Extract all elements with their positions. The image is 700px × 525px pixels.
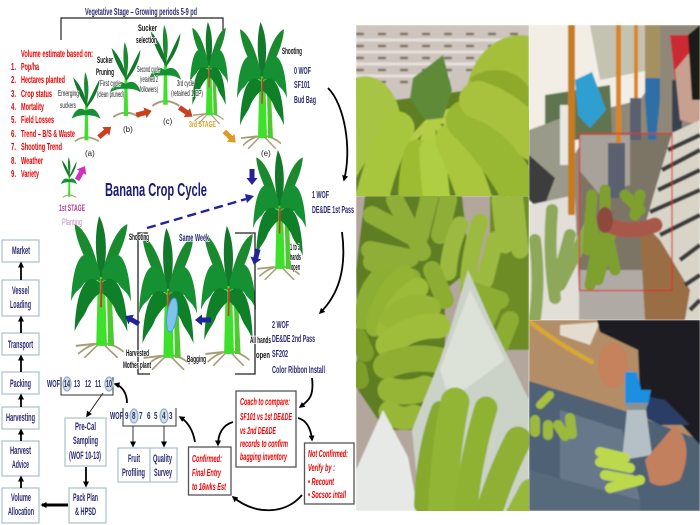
plant labels: 3rd cycle bbox=[177, 79, 194, 88]
timing labels: 1 WOF: DE&DE 1st Pass bbox=[312, 204, 354, 216]
volume estimate list bbox=[11, 48, 93, 180]
box: fruit profiling: Profiling bbox=[122, 467, 145, 479]
box: not confirmed bbox=[304, 443, 354, 504]
volume estimate list: 8. bbox=[11, 155, 16, 167]
plant: shooting, 0 WOF bbox=[237, 22, 287, 149]
box: coach to compare: records to confirm bbox=[240, 439, 288, 450]
flow: market to volume allocation: Packing bbox=[10, 378, 31, 390]
box: pre-cal sampling: (WOF 10-13) bbox=[69, 450, 101, 462]
box: not confirmed: • Recount bbox=[308, 477, 334, 488]
week of flowering row 9-3 bbox=[110, 408, 176, 426]
plant labels: followers) bbox=[140, 85, 158, 94]
week of flowering row 9-3: 5 bbox=[154, 410, 158, 422]
flow: market to volume allocation: Harvesting bbox=[6, 412, 35, 424]
box: quality survey bbox=[150, 448, 177, 482]
growth arrows bbox=[72, 103, 263, 329]
volume estimate list: Crop status bbox=[21, 88, 52, 100]
plant: third stage bbox=[190, 22, 228, 124]
volume estimate list: Pop/ha bbox=[21, 61, 39, 73]
timing labels: 2 WOF: 2 WOF bbox=[272, 319, 289, 331]
week of flowering row 9-3: 4 bbox=[162, 410, 166, 422]
plant labels: 1 to 3 bbox=[290, 242, 300, 252]
volume estimate list: Trend – B/S & Waste bbox=[21, 128, 75, 140]
timing labels: 2 WOF bbox=[272, 319, 325, 376]
volume estimate list: 1. bbox=[11, 61, 16, 73]
volume estimate list: 5. bbox=[11, 114, 16, 126]
volume estimate list: 3. bbox=[11, 88, 16, 100]
label: first stage planting: Planting bbox=[62, 217, 82, 227]
plant labels: Second cycle bbox=[137, 65, 160, 74]
plant labels: Emerging bbox=[58, 89, 79, 98]
box: confirmed: to 16wks Est bbox=[192, 482, 226, 493]
plant: sucker pruning bbox=[110, 42, 141, 117]
bag on plant bbox=[165, 297, 179, 333]
plant labels: (a) bbox=[85, 149, 95, 158]
flow: market to volume allocation: Loading bbox=[10, 299, 31, 311]
plant labels: First cycle bbox=[100, 79, 121, 88]
title: Banana Crop Cycle bbox=[105, 180, 207, 200]
box: quality survey: Survey bbox=[154, 467, 172, 479]
volume estimate list: 9. bbox=[11, 168, 16, 180]
volume estimate list: Hectares planted bbox=[21, 74, 65, 86]
label: first stage planting bbox=[59, 203, 85, 227]
timing labels: 2 WOF: SF202 bbox=[272, 348, 288, 360]
week of flowering row 14-10 bbox=[47, 377, 113, 395]
plant labels: Shooting bbox=[282, 46, 302, 56]
flow: market to volume allocation: Allocation bbox=[8, 506, 34, 518]
panel: banana crop cycle diagram: hands bbox=[290, 252, 301, 262]
connector lines bbox=[42, 393, 164, 505]
timing labels: 0 WOF: 0 WOF bbox=[294, 65, 311, 77]
timing labels: 1 WOF: 1 WOF bbox=[312, 189, 329, 201]
box: confirmed: Confirmed: bbox=[192, 454, 222, 465]
flow: market to volume allocation: Harvest bbox=[10, 445, 31, 457]
plant labels: suckers bbox=[60, 101, 76, 110]
timing labels: 0 WOF: SF101 bbox=[294, 79, 310, 91]
volume estimate list: Volume estimate based on: bbox=[21, 48, 93, 60]
plant: emerging suckers bbox=[72, 72, 100, 141]
timing labels: 0 WOF bbox=[294, 65, 316, 106]
plant labels: (c) bbox=[163, 117, 173, 126]
volume estimate list: Variety bbox=[21, 168, 39, 180]
week of flowering row 9-3: 6 bbox=[147, 410, 151, 422]
volume estimate list: 7. bbox=[11, 141, 16, 153]
week of flowering row 9-3: WOF bbox=[110, 410, 123, 422]
flow: market to volume allocation: Vessel bbox=[12, 285, 29, 297]
box: not confirmed: Verify by : bbox=[308, 463, 335, 474]
timing labels: 2 WOF: Color Ribbon Install bbox=[272, 364, 325, 376]
plant labels: Shooting bbox=[129, 232, 149, 242]
box: pre-cal sampling: Sampling bbox=[73, 435, 98, 447]
flow: market to volume allocation: Advice bbox=[12, 459, 29, 471]
flow: market to volume allocation bbox=[2, 240, 39, 523]
week of flowering row 14-10: 10 bbox=[106, 378, 112, 390]
week of flowering row 9-3: 9 bbox=[125, 410, 129, 422]
plant: first stage planting bbox=[61, 157, 77, 197]
week of flowering row 14-10: 11 bbox=[95, 378, 101, 390]
dashed arrow to 1 WOF bbox=[147, 194, 254, 228]
same week frame bbox=[138, 233, 255, 374]
volume estimate list: Shooting Trend bbox=[21, 141, 62, 153]
week of flowering row 14-10: 14 bbox=[64, 378, 70, 390]
label: third stage: 3rd STAGE bbox=[189, 119, 216, 129]
plant labels: Mother plant bbox=[123, 360, 151, 370]
box: quality survey: Quality bbox=[153, 453, 172, 465]
plant labels: Harvested bbox=[126, 348, 149, 358]
box: coach to compare: Coach to compare: bbox=[240, 397, 290, 408]
box: pack plan: Pack Plan bbox=[73, 492, 98, 504]
plant: harvested mother plant bbox=[71, 216, 131, 358]
box: coach to compare bbox=[236, 391, 296, 467]
plant labels: Bagging bbox=[187, 354, 206, 364]
plant: all hands open bbox=[201, 226, 256, 366]
heading: vegetative stage: Vegetative Stage – Growing periods 5-9 pd bbox=[85, 6, 197, 18]
box: confirmed bbox=[188, 447, 231, 495]
plant: bagging bbox=[139, 228, 197, 370]
plant labels: Sucker bbox=[97, 55, 113, 65]
vegetative stage bracket bbox=[61, 18, 223, 40]
plant labels: open bbox=[256, 350, 270, 360]
week of flowering row 9-3: 8 bbox=[132, 410, 136, 422]
plant: sucker selection bbox=[149, 25, 181, 106]
box: coach to compare: vs 2nd DE&DE bbox=[240, 426, 276, 437]
timing labels: 0 WOF: Bud Bag bbox=[294, 94, 316, 106]
week of flowering row 14-10: 13 bbox=[74, 378, 80, 390]
plant labels: Pruning bbox=[96, 67, 114, 77]
volume estimate list: Field Losses bbox=[21, 114, 54, 126]
box: fruit profiling bbox=[118, 448, 150, 482]
timing labels: 2 WOF: DE&DE 2nd Pass bbox=[272, 333, 315, 345]
photo: banana crown close-up bbox=[355, 25, 534, 208]
flow: market to volume allocation: Transport bbox=[8, 339, 33, 351]
flow: market to volume allocation: Volume bbox=[11, 492, 31, 504]
panel: banana crop cycle diagram bbox=[2, 6, 354, 523]
photo: packing shed worker bbox=[529, 25, 700, 320]
box: pre-cal sampling bbox=[65, 418, 106, 466]
plant labels: (clean pruned) bbox=[97, 90, 124, 99]
plant labels: Same Week bbox=[179, 232, 209, 244]
plant labels bbox=[58, 23, 302, 370]
box: fruit profiling: Fruit bbox=[128, 453, 140, 465]
box: pack plan: & HPSD bbox=[75, 506, 96, 518]
week of flowering row 9-3: 7 bbox=[139, 410, 143, 422]
photo: washing bananas bbox=[529, 320, 700, 511]
plant labels: selection bbox=[136, 35, 157, 45]
volume estimate list: 4. bbox=[11, 101, 16, 113]
volume estimate list: Weather bbox=[21, 155, 43, 167]
photo: bananas with plastic bag bbox=[356, 195, 530, 518]
plant labels: All hands bbox=[250, 335, 271, 345]
box: pack plan bbox=[69, 488, 106, 523]
label: first stage planting: 1st STAGE bbox=[59, 203, 85, 213]
box: not confirmed: Not Confirmed: bbox=[308, 449, 348, 460]
box: coach to compare: SF101 vs 1st DE&DE bbox=[240, 412, 292, 423]
plant: 1 WOF bbox=[253, 150, 306, 280]
box: confirmed: Final Entry bbox=[192, 468, 221, 479]
curved process arrows bbox=[115, 88, 347, 510]
volume estimate list: 6. bbox=[11, 128, 16, 140]
week of flowering row 9-3: 3 bbox=[169, 410, 173, 422]
plant labels: Sucker bbox=[138, 23, 157, 33]
flow: market to volume allocation: Market bbox=[12, 245, 30, 257]
timing labels: 1 WOF bbox=[312, 189, 354, 216]
box: coach to compare: bagging inventory bbox=[240, 452, 287, 463]
plant labels: (retained 1 EP) bbox=[171, 89, 203, 98]
volume estimate list: 2. bbox=[11, 74, 16, 86]
plant labels: (b) bbox=[123, 125, 133, 134]
week of flowering row 14-10: WOF bbox=[47, 378, 60, 390]
box: not confirmed: • Socsoc intall bbox=[308, 490, 346, 501]
plant labels: (e) bbox=[261, 149, 271, 158]
plant labels: (retained 2 bbox=[140, 75, 158, 84]
plant labels: open bbox=[291, 262, 300, 272]
week of flowering row 14-10: 12 bbox=[85, 378, 91, 390]
box: pre-cal sampling: Pre-Cal bbox=[75, 421, 96, 433]
volume estimate list: Mortality bbox=[21, 101, 44, 113]
